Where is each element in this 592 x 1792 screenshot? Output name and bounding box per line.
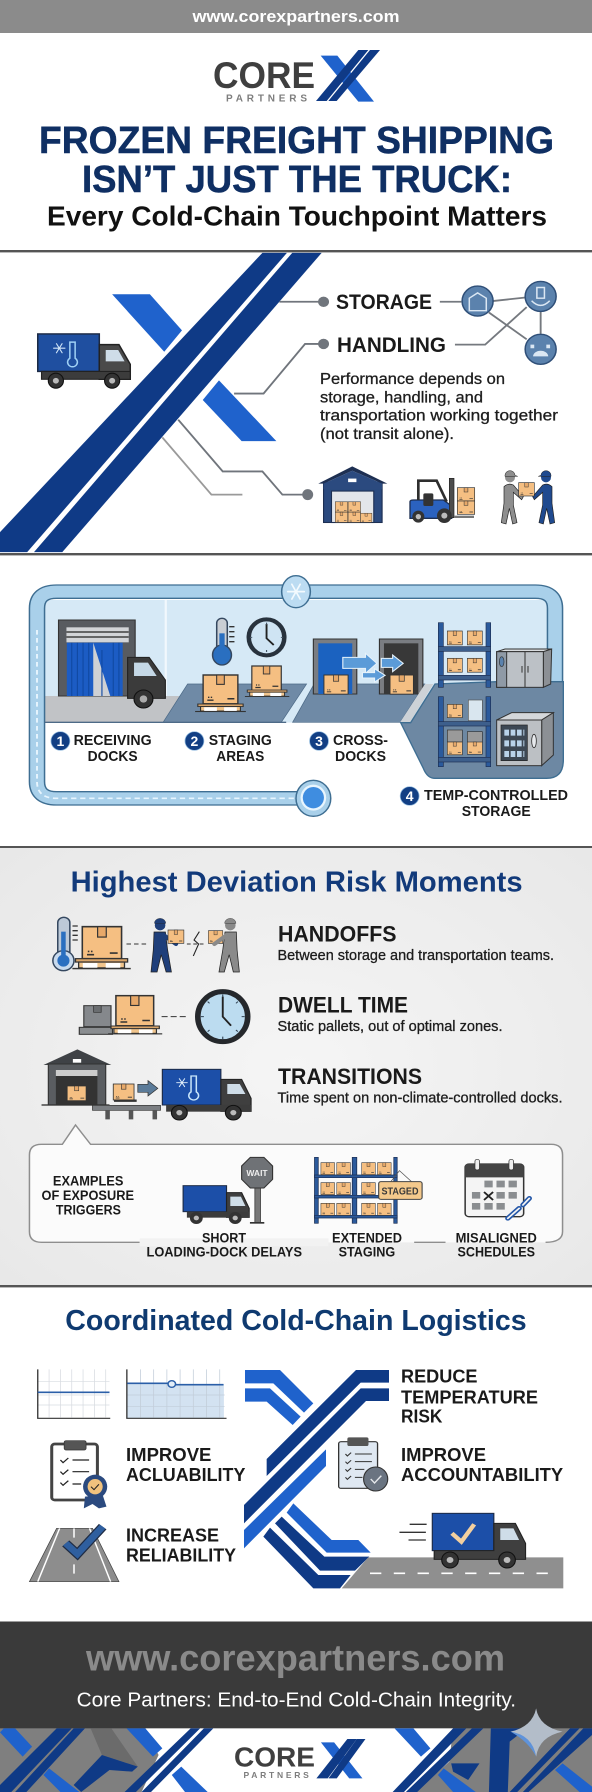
floor panels (45, 684, 425, 723)
icon: control cabinet (497, 713, 553, 766)
large X graphic (244, 1370, 389, 1588)
label: improve accountability (401, 1444, 564, 1485)
label: improve acluability: IMPROVE (126, 1444, 211, 1465)
icon: transition scene (42, 1049, 251, 1120)
number badges (51, 732, 419, 805)
temp-controlled storage floor (399, 682, 563, 778)
performance text (320, 371, 558, 443)
icon: road and truck (342, 1513, 563, 1588)
footer logo wordmark: CORE (234, 1742, 315, 1772)
badge numbers: 4 (406, 788, 414, 804)
label: increase reliability: INCREASE (126, 1525, 219, 1546)
icon: upper storage rack (438, 623, 491, 687)
label: cross-docks: CROSS- (333, 732, 388, 749)
icon: clipboard with award (52, 1441, 107, 1508)
tag text: STAGED (382, 1186, 419, 1198)
interior scene background (45, 600, 547, 723)
panel: storage handling transportation (0, 253, 558, 552)
label: temp-controlled storage (424, 787, 568, 820)
performance text: Performance depends on (320, 371, 505, 388)
badge numbers: 1 (57, 733, 65, 749)
label: improve accountability: IMPROVE (401, 1444, 486, 1465)
label: improve acluability: ACLUABILITY (126, 1464, 246, 1485)
label: reduce temperature risk: TEMPERATURE (401, 1386, 538, 1407)
panel: coordinated cold-chain logistics (29, 1305, 564, 1588)
examples of exposure triggers label: TRIGGERS (56, 1203, 121, 1218)
icon: clock (249, 619, 284, 655)
transitions text (278, 1064, 562, 1106)
examples of exposure triggers label: OF EXPOSURE (42, 1188, 134, 1203)
handoffs text: HANDOFFS (278, 922, 396, 947)
chart: area with marker (127, 1369, 227, 1418)
top URL bar (0, 0, 592, 33)
icon: handoff scene (53, 917, 239, 972)
label: cross-docks (333, 732, 388, 765)
label: receiving docks: DOCKS (88, 748, 138, 765)
icon: staged rack (314, 1157, 422, 1223)
connector lines (162, 297, 328, 499)
bottom pattern strip with logo (0, 1708, 592, 1792)
large X graphic (0, 253, 322, 552)
label: handling: HANDLING (337, 334, 446, 357)
icon: freezer cabinet (497, 649, 552, 687)
label: receiving docks: RECEIVING (74, 732, 152, 749)
label: short loading-dock delays: LOADING-DOCK DELAYS (146, 1245, 302, 1260)
chart: stable line (38, 1369, 110, 1418)
badge numbers: 2 (191, 733, 199, 749)
label: extended staging: STAGING (339, 1245, 395, 1260)
label: misaligned schedules: SCHEDULES (458, 1245, 535, 1260)
top URL bar: www.corexpartners.com (191, 7, 400, 26)
footer band (0, 1622, 592, 1728)
panel: cold chain touchpoints (37, 576, 568, 820)
footer logo X (316, 1739, 365, 1778)
title: ISN’T JUST THE TRUCK: (82, 159, 512, 201)
label: short loading-dock delays: SHORT (202, 1230, 247, 1245)
logo: Core X Partners: PARTNERS (226, 94, 307, 104)
examples of exposure triggers label (42, 1174, 134, 1218)
label: storage: STORAGE (336, 291, 432, 314)
icon: calendar with link (465, 1159, 529, 1218)
label: cross-docks: DOCKS (335, 748, 386, 765)
label: improve accountability: ACCOUNTABILITY (401, 1464, 564, 1485)
label: temp-controlled storage: STORAGE (462, 803, 531, 820)
label: increase reliability: RELIABILITY (126, 1545, 237, 1566)
label: reduce temperature risk (401, 1366, 538, 1427)
icon: road with check (29, 1527, 119, 1582)
handoffs text (278, 922, 554, 964)
performance text: transportation working together (320, 408, 558, 425)
title: FROZEN FREIGHT SHIPPING (39, 120, 554, 162)
footer logo wordmark: PARTNERS (244, 1770, 309, 1780)
icon: receiving dock and truck (59, 620, 165, 708)
dwell time text: Static pallets, out of optimal zones. (278, 1019, 502, 1035)
icon: thermometer (213, 618, 234, 665)
label: extended staging (332, 1230, 402, 1260)
snowflake node (282, 576, 310, 608)
dwell time text: DWELL TIME (278, 993, 408, 1018)
icon: truck and wait sign (183, 1157, 273, 1224)
label: short loading-dock delays (146, 1230, 302, 1260)
logo: Core X Partners (213, 50, 380, 104)
logo: Core X Partners: CORE (213, 55, 315, 96)
end node (296, 780, 331, 816)
label: staging areas (209, 732, 272, 765)
label: receiving docks (74, 732, 152, 765)
icon: warehouse (318, 466, 387, 522)
performance text: (not transit alone). (320, 426, 454, 443)
handoffs text: Between storage and transportation teams. (278, 948, 554, 964)
label: staging areas: AREAS (216, 748, 264, 765)
label: misaligned schedules (456, 1230, 537, 1260)
pipe frame (37, 592, 555, 798)
icon: clipboard with check (339, 1437, 388, 1491)
title (39, 120, 554, 232)
performance text: storage, handling, and (320, 390, 483, 406)
icon: forklift (410, 478, 475, 523)
transitions text: Time spent on non-climate-controlled docks. (278, 1090, 562, 1106)
icon: lower storage rack (438, 697, 491, 767)
icon: network nodes (440, 281, 556, 364)
label: reduce temperature risk: RISK (401, 1406, 443, 1427)
heading: risk moments: Highest Deviation Risk Moments (71, 867, 523, 899)
label: increase reliability (126, 1525, 237, 1566)
label: improve acluability (126, 1444, 246, 1485)
badge numbers (57, 733, 414, 804)
label: extended staging: EXTENDED (332, 1230, 402, 1245)
footer band: Core Partners: End-to-End Cold-Chain Integrity. (77, 1689, 516, 1712)
callout box (29, 1125, 563, 1246)
label: staging areas: STAGING (209, 732, 272, 749)
footer band: www.corexpartners.com (85, 1638, 505, 1679)
icon: cross-dock doors (313, 639, 423, 694)
badge numbers: 3 (315, 733, 323, 749)
dwell time text (278, 993, 502, 1035)
examples of exposure triggers label: EXAMPLES (53, 1174, 123, 1189)
icon: two workers handing box (501, 471, 555, 524)
icon: refrigerated truck (38, 334, 130, 388)
sign text: WAIT (246, 1168, 268, 1178)
icon: pallets of boxes (195, 666, 289, 712)
panel: highest deviation risk moments (0, 848, 592, 1285)
label: misaligned schedules: MISALIGNED (456, 1230, 537, 1245)
heading: logistics: Coordinated Cold-Chain Logistics (65, 1305, 527, 1337)
title: Every Cold-Chain Touchpoint Matters (47, 200, 547, 232)
label: temp-controlled storage: TEMP-CONTROLLED (424, 787, 568, 804)
label: reduce temperature risk: REDUCE (401, 1366, 478, 1387)
icon: dwell time scene (79, 992, 248, 1042)
transitions text: TRANSITIONS (278, 1064, 422, 1089)
